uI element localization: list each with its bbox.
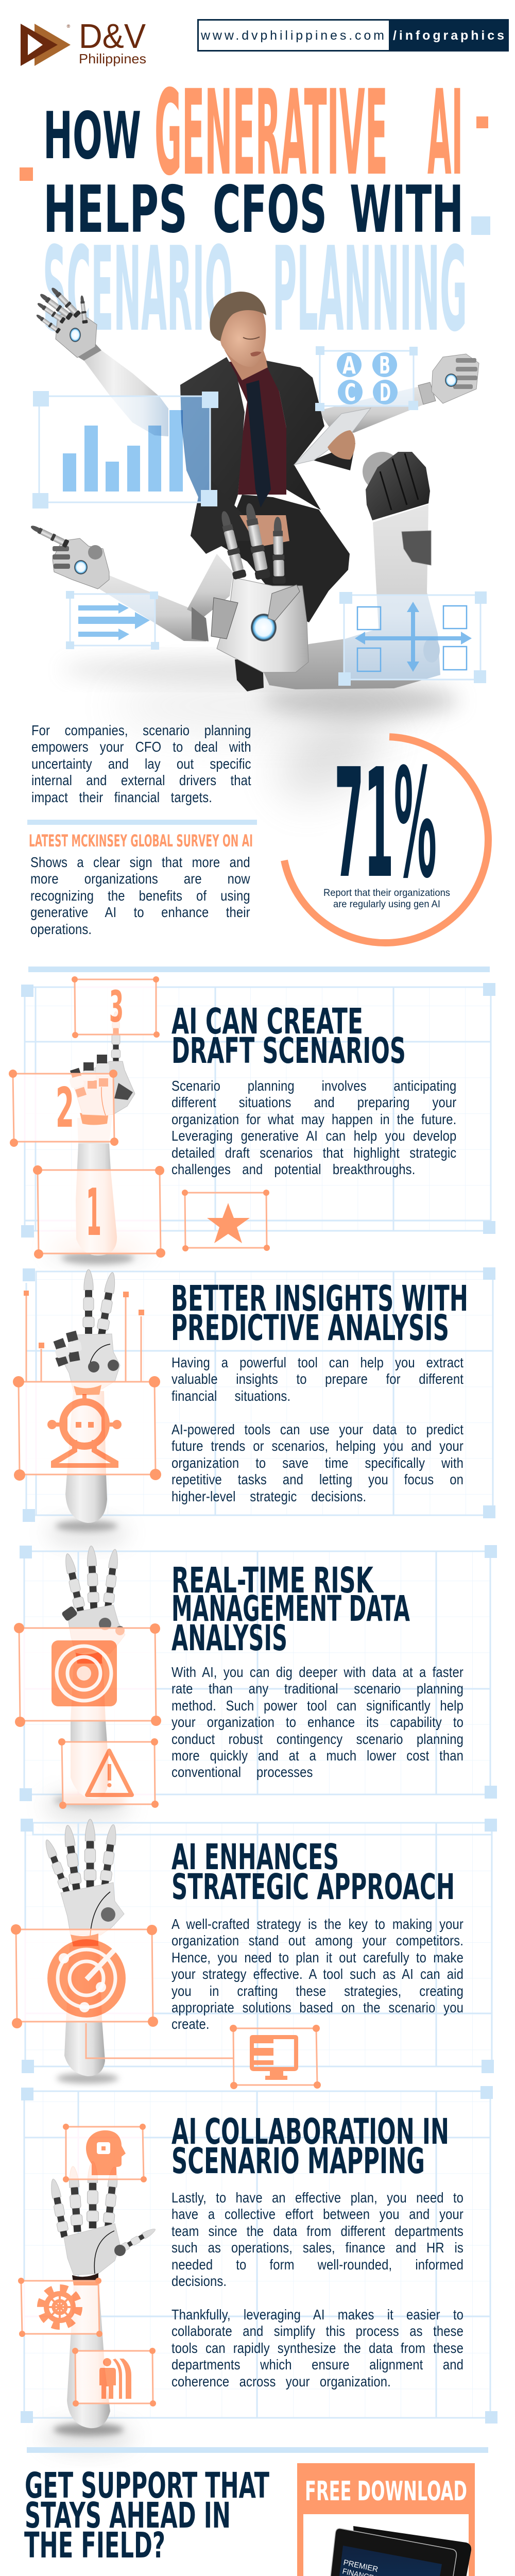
section 4 body text xyxy=(171,1916,464,2032)
arrows box xyxy=(66,591,159,650)
section 2 body text second paragraph: organization to save time specifically with xyxy=(171,1455,464,1471)
man: legs xyxy=(221,495,350,691)
section heading xyxy=(171,1278,468,1349)
section 1 body text: Leveraging generative AI can help you develop xyxy=(171,1128,456,1144)
section heading: AI ENHANCES xyxy=(171,1837,339,1878)
section heading: ANALYSIS xyxy=(171,1618,287,1659)
McKinsey survey heading: LATEST MCKINSEY GLOBAL SURVEY ON AI xyxy=(29,831,253,851)
McKinsey survey text xyxy=(30,854,250,937)
section 5 body text first paragraph: needed to form well-rounded, informed xyxy=(171,2257,464,2273)
section 1 body text: organization for what may happen in the future. xyxy=(171,1111,456,1127)
robot hand three fingers xyxy=(44,1546,131,1821)
section heading: REAL-TIME RISK xyxy=(171,1560,374,1601)
section 5 body text second paragraph: tools can rapidly synthesize the data from these xyxy=(171,2340,464,2356)
section 5 body text first paragraph xyxy=(171,2190,464,2289)
matrix box with cross arrows xyxy=(338,591,487,686)
section 1 body text: challenges and potential breakthroughs. xyxy=(171,1161,415,1177)
callout box with stems xyxy=(13,1291,161,1481)
closing heading: STAYS AHEAD IN xyxy=(25,2495,231,2536)
closing heading xyxy=(24,2465,269,2566)
section 1 body text xyxy=(171,1078,456,1177)
section heading xyxy=(171,1560,410,1659)
screen tint xyxy=(22,2127,153,2403)
section 1 panel: AI can create draft scenarios xyxy=(9,976,495,1264)
robot hand peace sign xyxy=(46,1269,129,1546)
callout box: target icon xyxy=(14,1623,161,1727)
callout number 3 xyxy=(72,976,160,1038)
ABCD options box: A xyxy=(342,351,356,379)
robot hand open with thumb xyxy=(42,2161,157,2452)
section 5 body text second paragraph: coherence across your organization. xyxy=(171,2374,391,2389)
McKinsey survey text: generative AI to enhance their xyxy=(30,904,250,920)
callout number 1: 1 xyxy=(86,1175,101,1250)
logo: D&V Philippines: Philippines xyxy=(79,51,146,66)
section 5 body text second paragraph: Thankfully, leveraging AI makes it easier to xyxy=(171,2307,464,2323)
closing heading: GET SUPPORT THAT xyxy=(25,2465,269,2506)
man: jacket xyxy=(180,357,355,554)
stat caption: are regularly using gen AI xyxy=(333,899,440,910)
closing heading: THE FIELD? xyxy=(24,2525,165,2566)
section 3 body text: conventional processes xyxy=(171,1764,313,1780)
chart box with bars xyxy=(32,391,218,509)
section 5 body text first paragraph: have a collective effort between you and your xyxy=(171,2206,464,2222)
title: How Generative AI helps CFOs with scenario planning: HELPS xyxy=(43,172,187,247)
ABCD options box: B xyxy=(379,351,390,379)
intro text: internal and external drivers that xyxy=(31,772,251,788)
callout box: monitor icon xyxy=(230,2025,321,2089)
robot hand pointing up xyxy=(49,1012,147,1264)
section 4 panel: AI enhances strategic approach xyxy=(11,1819,497,2089)
callout number 2: 2 xyxy=(56,1076,74,1140)
callout box: warning icon xyxy=(58,1738,159,1809)
section heading: AI CAN CREATE xyxy=(171,1001,363,1042)
section 2 body text first paragraph xyxy=(171,1354,464,1404)
robot arm upper left xyxy=(35,285,168,436)
section 3 body text xyxy=(171,1664,464,1780)
section 5 body text second paragraph: departments which ensure alignment and xyxy=(171,2357,464,2372)
callout box: radar target icon xyxy=(11,1924,233,2058)
section 5 panel: AI collaboration in scenario mapping xyxy=(18,2086,497,2452)
man: head xyxy=(210,292,269,380)
section 3 body text: With AI, you can dig deeper with data at a faster xyxy=(171,1664,464,1680)
section 3 body text: rate than any traditional scenario planning xyxy=(171,1681,464,1697)
intro text: empowers your CFO to deal with xyxy=(31,739,251,755)
section 4 body text: your strategy effective. A tool such as AI can aid xyxy=(171,1966,464,1982)
section 4 body text: create. xyxy=(171,2016,210,2032)
section 3 panel: real-time risk management data analysis xyxy=(14,1545,497,1821)
section 5 body text first paragraph: decisions. xyxy=(171,2273,227,2289)
section 1 body text: different situations and preparing your xyxy=(171,1094,456,1110)
star callout xyxy=(182,1190,270,1251)
hero illustration: CFO with robot arms xyxy=(29,285,479,814)
robot arm holding from tablet side xyxy=(318,354,479,433)
ABCD options box xyxy=(315,346,418,411)
stat caption xyxy=(323,888,450,910)
section 5 body text first paragraph: Lastly, to have an effective plan, you need to xyxy=(171,2190,464,2206)
section heading xyxy=(171,1837,455,1908)
intro text: uncertainty and lay out specific xyxy=(31,756,251,772)
section 2 body text first paragraph: valuable insights to prepare for different xyxy=(171,1371,464,1387)
tablet on stand xyxy=(296,2526,479,2576)
screen tint xyxy=(20,1629,156,1805)
website url banner xyxy=(198,19,509,52)
grid xyxy=(21,2086,497,2424)
grid xyxy=(21,1819,497,2073)
section 2 body text first paragraph: financial situations. xyxy=(171,1388,290,1404)
divider xyxy=(27,2447,488,2453)
ABCD options box: D xyxy=(380,379,391,406)
stat caption: Report that their organizations xyxy=(323,888,450,899)
title: How Generative AI helps CFOs with scenario planning: HOW xyxy=(43,98,141,174)
callout number 3: 3 xyxy=(109,981,124,1032)
section 1 body text: Scenario planning involves anticipating xyxy=(171,1078,456,1094)
section 4 body text: A well-crafted strategy is the key to making your xyxy=(171,1916,464,1932)
title: How Generative AI helps CFOs with scenario planning xyxy=(43,64,467,358)
McKinsey survey text: recognizing the benefits of using xyxy=(30,888,250,904)
tablet on stand: PREMIER xyxy=(342,2558,379,2574)
section heading xyxy=(171,1001,406,1072)
callout number 1 xyxy=(33,1165,165,1259)
section 2 body text second paragraph xyxy=(171,1421,464,1504)
section 3 body text: conduct robust contingency scenario planning xyxy=(171,1731,464,1747)
intro text: For companies, scenario planning xyxy=(31,722,251,738)
McKinsey survey heading xyxy=(27,820,257,851)
section 5 body text first paragraph: such as operations, sales, finance and HR is xyxy=(171,2240,464,2256)
logo: D&V Philippines: D&V xyxy=(79,17,146,56)
free download panel xyxy=(296,2463,479,2576)
man: tablet and hand xyxy=(294,408,371,465)
section 2 panel: better insights with predictive analysis xyxy=(13,1267,495,1546)
website url banner: /infographics xyxy=(393,28,504,43)
section heading xyxy=(171,2111,449,2182)
McKinsey survey text: operations. xyxy=(30,921,92,937)
section 4 body text: organization stand out among your competitors. xyxy=(171,1933,464,1948)
section 3 body text: method. Such power tool can significantly help xyxy=(171,1698,464,1714)
section 5 body text second paragraph: collaborate and simplify this process as these xyxy=(171,2323,464,2339)
intro text: impact their financial targets. xyxy=(31,789,212,805)
screen tint on boxes xyxy=(13,979,160,1253)
section 5 body text second paragraph xyxy=(171,2307,464,2389)
section 4 body text: appropriate solutions based on the scenario you xyxy=(171,1999,464,2015)
section 2 body text second paragraph: future trends or scenarios, helping you and your xyxy=(171,1438,464,1454)
section 5 body text first paragraph: team since the data from different departments xyxy=(171,2223,464,2239)
section 2 body text second paragraph: AI-powered tools can use your data to predict xyxy=(171,1421,464,1437)
71% stat circle xyxy=(284,736,488,943)
section 2 body text first paragraph: Having a powerful tool can help you extract xyxy=(171,1354,464,1370)
screen tint xyxy=(16,1930,152,2022)
icon: AI head xyxy=(47,1394,122,1468)
logo: D&V Philippines xyxy=(21,17,146,66)
screen tint xyxy=(19,1382,155,1475)
divider xyxy=(28,967,490,972)
title: How Generative AI helps CFOs with scenario planning: CFOS xyxy=(213,172,327,247)
intro text xyxy=(31,722,251,805)
bar chart xyxy=(63,410,183,492)
grid xyxy=(20,1545,497,1801)
robot arm pointing left xyxy=(29,523,206,641)
grid xyxy=(21,983,495,1238)
title decorative squares xyxy=(20,116,490,235)
robot hand open xyxy=(42,1819,124,2083)
McKinsey survey text: more organizations are now xyxy=(30,871,250,887)
robot big hand with three fingers xyxy=(187,502,308,672)
man: shirt and tie xyxy=(229,362,286,507)
ABCD options box: C xyxy=(345,379,356,406)
section 2 body text second paragraph: higher-level strategic decisions. xyxy=(171,1488,366,1504)
section 4 body text: you in crafting these strategies, creating xyxy=(171,1983,464,1999)
robot arm lower right with dark shoulder xyxy=(263,452,440,689)
section 1 body text: detailed draft scenarios that highlight strategic xyxy=(171,1145,456,1161)
section 3 body text: more quickly and at a much lower cost than xyxy=(171,1748,464,1764)
section 3 body text: your organization to enhance its capability to xyxy=(171,1714,464,1730)
section 2 body text second paragraph: repetitive tasks and letting you focus on xyxy=(171,1471,464,1487)
logo: D&V Philippines: ® xyxy=(67,24,71,29)
section 4 body text: Hence, you need to plan it out carefully to make xyxy=(171,1950,464,1965)
callout box: head icon xyxy=(63,2124,147,2182)
callout box: gear icon xyxy=(18,2278,102,2337)
grid xyxy=(23,1267,495,1522)
callout box: people icon xyxy=(72,2348,156,2406)
website url banner: www.dvphilippines.com xyxy=(200,28,384,43)
McKinsey survey text: Shows a clear sign that more and xyxy=(30,854,250,870)
floor shadow xyxy=(62,658,458,814)
callout number 2 xyxy=(9,1070,118,1147)
